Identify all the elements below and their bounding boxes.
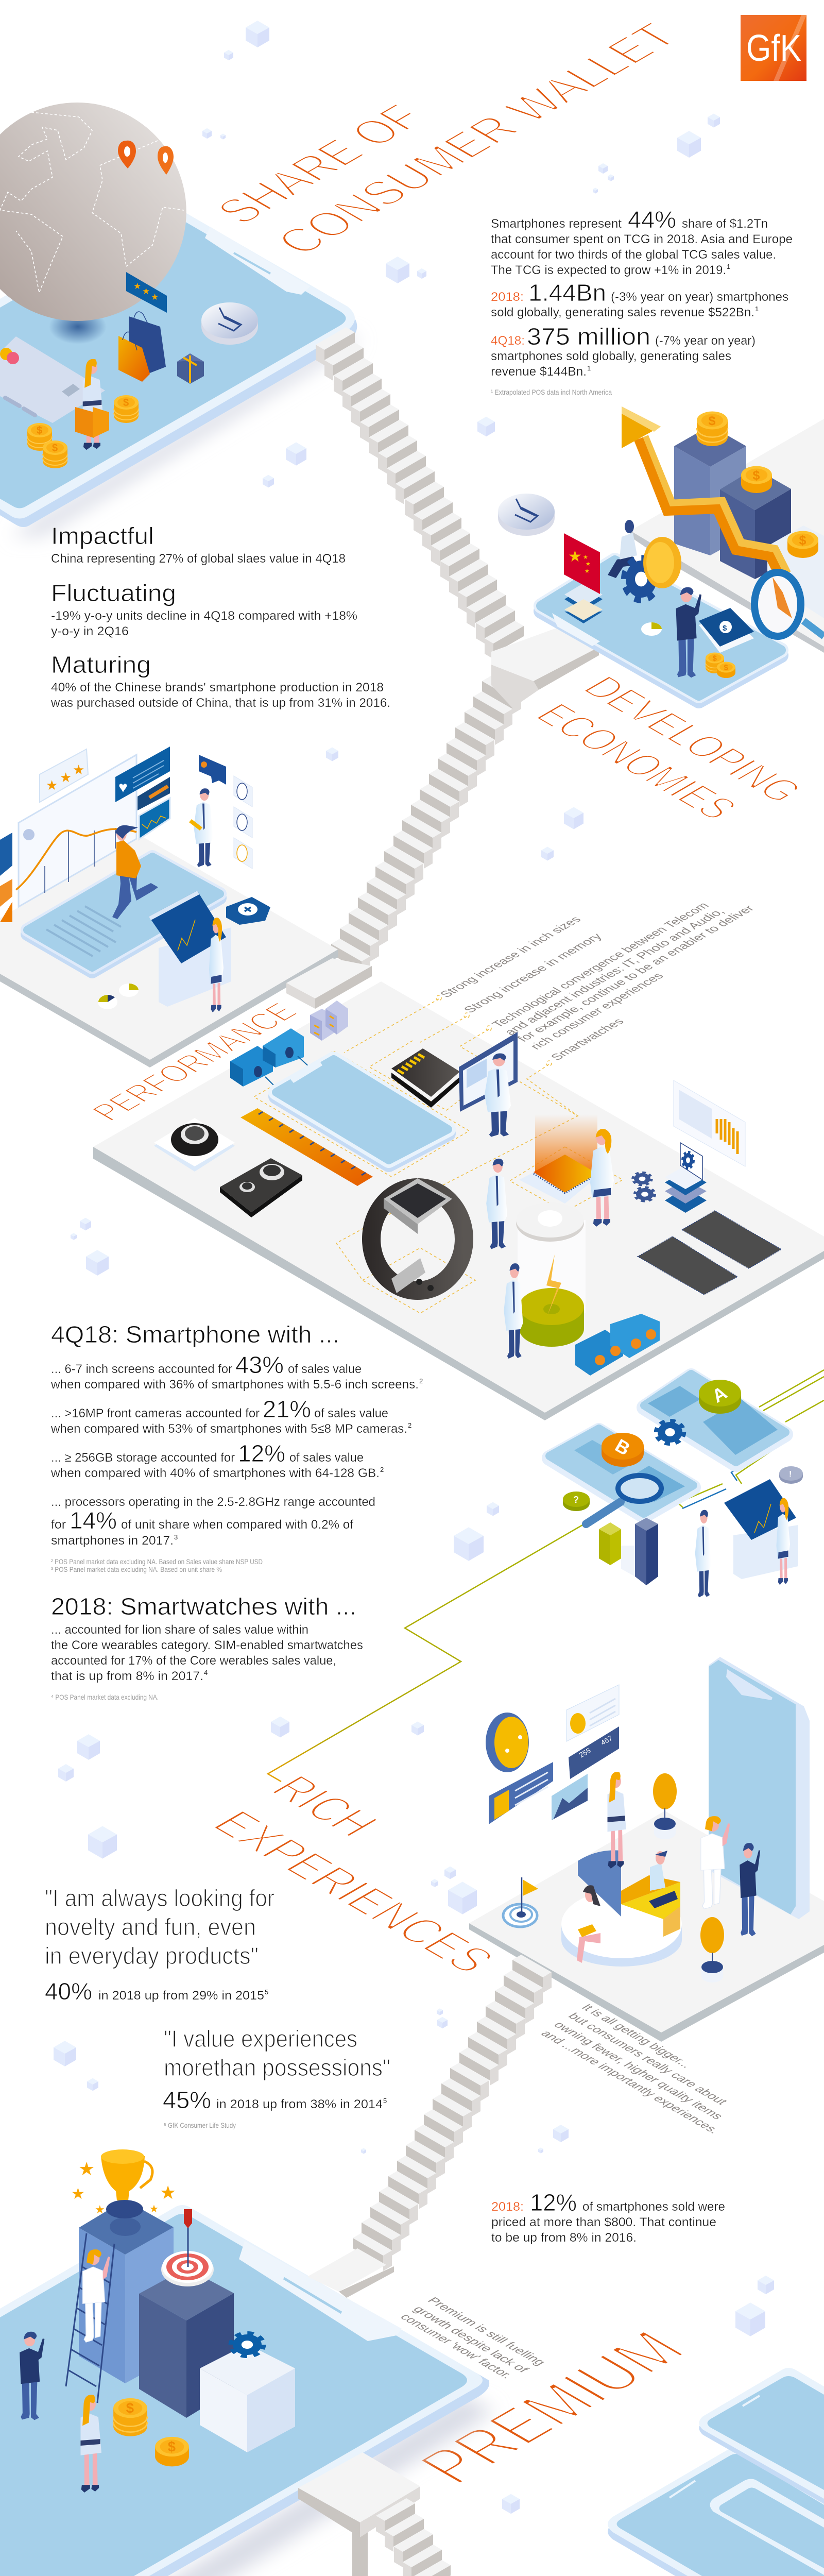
person: woman in navy top bbox=[740, 1843, 760, 1936]
text: smartwatch stats: 4 bbox=[204, 1669, 208, 1676]
title: premium: PREMIUM bbox=[403, 2321, 701, 2494]
card: heart bbox=[115, 747, 170, 802]
badge A bbox=[699, 1380, 741, 1414]
text: wallet stats: 44% bbox=[628, 206, 676, 233]
person: scientist bbox=[695, 1510, 711, 1597]
phone: middle bbox=[710, 2479, 824, 2575]
card: line chart bbox=[139, 798, 170, 839]
card: star rating: ★ bbox=[73, 762, 84, 777]
title: developing economies: ECONOMIES bbox=[525, 697, 748, 826]
person: woman with tablet bbox=[590, 1129, 614, 1227]
icon: trophy with stars: ★ bbox=[95, 2203, 105, 2216]
text: smartphone stats: when compared with 53% of smartphones with 5≤8 MP cameras. bbox=[50, 1422, 407, 1436]
logo: GfK: GfK bbox=[746, 28, 801, 69]
icon: question badge bbox=[563, 1492, 590, 1511]
panel: developing phone bbox=[498, 494, 824, 701]
block: white column right bbox=[767, 526, 824, 618]
icon: coins bbox=[113, 2398, 189, 2466]
gauges bbox=[234, 776, 252, 869]
icon: shopping bags bbox=[118, 312, 166, 382]
icon: ladder bbox=[66, 2233, 114, 2403]
icon: small pie bbox=[641, 622, 662, 636]
phone notch bbox=[205, 227, 310, 295]
text: wallet stats: share of $1.2Tn bbox=[682, 217, 768, 231]
title: performance: PERFORMANCE bbox=[83, 997, 305, 1126]
panel: analytics platform bbox=[0, 747, 338, 1067]
person: climbing woman bbox=[83, 2249, 110, 2342]
panel: rich experiences platform bbox=[469, 1657, 824, 2042]
text: premium stat: 2018: bbox=[491, 2200, 524, 2214]
text: impactful, fluctuating, maturing: Impactful bbox=[51, 522, 154, 549]
text: performance callouts: Technological convergence between Telecom bbox=[489, 901, 712, 1029]
text: performance callouts: for example, continue to be an enabler to deliver bbox=[514, 903, 758, 1044]
icon: magnifier bbox=[586, 1476, 661, 1524]
icon: small pies bbox=[98, 984, 139, 1009]
text: smartphone stats: 21% bbox=[263, 1396, 311, 1422]
text: wallet stats: revenue $144Bn. bbox=[491, 365, 587, 379]
text: experiences quote: 5 bbox=[383, 2097, 387, 2105]
icon: kiosk with chart bbox=[149, 891, 231, 1007]
panel: premium big phone bbox=[0, 2149, 494, 2576]
text: smartwatch stats: the Core wearables category. SIM-enabled smartwatches bbox=[51, 1638, 363, 1652]
text: smartphone stats: 14% bbox=[70, 1507, 117, 1534]
card: star rating bbox=[40, 749, 88, 802]
chart: 3d pie bbox=[561, 1850, 682, 1967]
connector: dashed feature lines bbox=[254, 995, 623, 1313]
text: bigger callout: but consumers really care about bbox=[565, 2011, 730, 2107]
phone: upright display bbox=[709, 1657, 810, 1919]
icon: cooling fans bbox=[575, 1314, 660, 1376]
icon: china flag: ★ bbox=[583, 554, 588, 561]
icon: star rating card: ★ bbox=[151, 292, 159, 302]
stairs: second flight bbox=[331, 676, 521, 977]
landing: below third flight bbox=[307, 2248, 394, 2298]
phone notch bbox=[239, 2241, 402, 2341]
panel: A/B testing cluster bbox=[550, 1374, 803, 1597]
text: novelty quote: in everyday products" bbox=[45, 1942, 259, 1969]
text: bigger callout: It is all getting bigger... bbox=[578, 2002, 695, 2070]
phone A bbox=[644, 1374, 785, 1464]
text: novelty quote bbox=[45, 1885, 274, 2005]
arrow: falling growth arrow bbox=[622, 406, 784, 576]
icon: black memory chips bbox=[638, 1211, 781, 1295]
text: novelty quote: in 2018 up from 29% in 2015 bbox=[98, 1989, 264, 2003]
connector: green line chain bbox=[268, 1370, 824, 1782]
text: smartphone stats: ² POS Panel market data excluding NA. Based on Sales value share NSP USD bbox=[51, 1557, 263, 1566]
text: performance callouts: rich consumer experiences bbox=[527, 971, 667, 1052]
text: smartphone stats: 3 bbox=[174, 1533, 178, 1541]
person: man at tablet bbox=[485, 1053, 511, 1137]
icon: memory card bbox=[391, 1048, 460, 1108]
text: smartphone stats: ... 6-7 inch screens accounted for bbox=[51, 1362, 232, 1376]
icon: credit card bbox=[0, 336, 105, 423]
text: smartphone stats: of sales value bbox=[289, 1451, 364, 1465]
text: experiences quote: morethan possessions" bbox=[164, 2054, 390, 2081]
text: smartwatch stats: 2018: Smartwatches with ... bbox=[51, 1593, 356, 1620]
card: image bbox=[552, 1774, 588, 1820]
icon: location pins bbox=[118, 141, 174, 175]
icon: cart button bbox=[498, 494, 555, 536]
text: premium callout bbox=[397, 2296, 548, 2380]
icon: china flag: ★ bbox=[586, 561, 591, 567]
icon: flag target bbox=[503, 1877, 538, 1927]
text: bigger callout: owning fewer, higher quality items bbox=[551, 2020, 726, 2122]
person: man presenting bbox=[701, 1816, 730, 1909]
icon: target with dart bbox=[161, 2209, 214, 2286]
icon: china flag: ★ bbox=[585, 568, 590, 574]
icon: coins bbox=[706, 652, 735, 678]
person: crouching man bbox=[608, 520, 639, 578]
block: light columns bbox=[674, 426, 746, 555]
chart fragments at left edge bbox=[0, 833, 12, 922]
card: likes counter: 467 bbox=[599, 1734, 614, 1747]
stairs: third flight bbox=[353, 1955, 552, 2271]
text: smartwatch stats: ⁴ POS Panel market data excluding NA. bbox=[51, 1693, 159, 1701]
card: heart: ♥ bbox=[118, 779, 128, 796]
text: novelty quote: "I am always looking for bbox=[45, 1885, 274, 1911]
text: performance callouts bbox=[437, 901, 758, 1062]
stairs: first flight bbox=[316, 327, 524, 659]
card: star rating: ★ bbox=[60, 770, 72, 785]
text: impactful, fluctuating, maturing bbox=[50, 522, 390, 710]
person: man by battery bbox=[504, 1263, 523, 1359]
person: sitting woman bbox=[577, 1885, 600, 1963]
text: wallet stats: 2018: bbox=[491, 290, 524, 304]
person: woman at kiosk bbox=[209, 918, 224, 1012]
text: performance callouts: and adjacent industries: IT, Photo and Audio, bbox=[502, 906, 728, 1037]
text: wallet stats: Smartphones represent bbox=[491, 217, 622, 231]
icon: coins bbox=[27, 395, 139, 468]
block: dark columns bbox=[720, 468, 791, 579]
icon: trophy with stars: ★ bbox=[160, 2182, 176, 2203]
text: wallet stats: sold globally, generating sales revenue $522Bn. bbox=[491, 306, 754, 319]
text: impactful, fluctuating, maturing: 40% of the Chinese brands' smartphone production in 2018 bbox=[51, 681, 384, 694]
chart: iso bars bbox=[599, 1518, 658, 1585]
icon: star rating card bbox=[126, 272, 167, 313]
text: wallet stats: 1 bbox=[727, 263, 730, 270]
phone: front bbox=[699, 2368, 824, 2504]
text: wallet stats: (-3% year on year) smartphones bbox=[611, 290, 788, 304]
icon: camera lens on base bbox=[154, 1118, 235, 1172]
text: experiences quote: ⁵ GfK Consumer Life Study bbox=[164, 2121, 236, 2129]
text: premium stat: to be up from 8% in 2016. bbox=[491, 2231, 637, 2245]
text: smartphone stats: when compared with 40% of smartphones with 64-128 GB. bbox=[50, 1466, 380, 1480]
text: novelty quote: 5 bbox=[265, 1988, 268, 1996]
icon: gears bbox=[633, 1173, 654, 1201]
icon: trophy with stars: ★ bbox=[149, 2204, 159, 2215]
text: smartphone stats: ... ≥ 256GB storage accounted for bbox=[51, 1451, 235, 1465]
text: wallet stats: 4Q18: bbox=[491, 334, 525, 348]
icon: exclamation badge: ! bbox=[789, 1470, 792, 1479]
text: experiences quote bbox=[163, 2025, 390, 2129]
text: smartphone stats: ... >16MP front cameras accounted for bbox=[51, 1406, 260, 1420]
person: man with folder bbox=[486, 1159, 507, 1249]
icon: speech bubble bbox=[199, 755, 226, 785]
text: smartphone stats: 2 bbox=[380, 1466, 384, 1473]
text: experiences quote: "I value experiences bbox=[164, 2025, 357, 2052]
text: premium stat: priced at more than $800. That continue bbox=[491, 2215, 716, 2229]
text: smartwatch stats: accounted for 17% of the Core werables sales value, bbox=[51, 1654, 336, 1668]
text: smartphone stats: 2 bbox=[419, 1377, 423, 1385]
text: smartwatch stats bbox=[51, 1593, 363, 1701]
icon: trophy with stars: ★ bbox=[71, 2185, 85, 2202]
icon: smartwatch bbox=[371, 1178, 464, 1293]
text: premium stat: of smartphones sold were bbox=[582, 2200, 725, 2214]
icon: chat bubble bbox=[486, 1713, 529, 1772]
icon: china flag: ★ bbox=[568, 548, 582, 565]
block: dark column bbox=[139, 2268, 234, 2418]
card: article bbox=[489, 1762, 553, 1824]
icon: star rating card: ★ bbox=[133, 281, 141, 291]
text: performance callouts: Smartwatches bbox=[548, 1016, 627, 1062]
title: rich experiences: EXPERIENCES bbox=[201, 1803, 507, 1980]
text: novelty quote: novelty and fun, even bbox=[45, 1913, 256, 1940]
icon: exclamation badge bbox=[779, 1466, 803, 1484]
phone: performance centre bbox=[276, 1059, 448, 1164]
icon: question badge: ? bbox=[573, 1495, 579, 1505]
icon: gift box bbox=[177, 353, 204, 384]
text: premium stat bbox=[491, 2189, 725, 2245]
title: rich experiences: RICH bbox=[260, 1768, 390, 1844]
phone B bbox=[550, 1429, 693, 1516]
card: emoji review bbox=[566, 1685, 619, 1741]
stairs: fourth flight bbox=[376, 2498, 495, 2576]
person: woman shopper bbox=[75, 359, 109, 450]
text: impactful, fluctuating, maturing: Fluctuating bbox=[51, 580, 176, 606]
text: smartphone stats: 4Q18: Smartphone with ... bbox=[51, 1321, 339, 1348]
chart: orange bars panel bbox=[674, 1080, 745, 1166]
landing: below second flight bbox=[286, 958, 372, 1009]
text: smartphone stats: of sales value bbox=[288, 1362, 362, 1376]
icon: stacked layers bbox=[564, 583, 603, 623]
text: wallet stats: that consumer spent on TCG in 2018. Asia and Europe bbox=[491, 232, 793, 246]
icon: potted plants bbox=[653, 1773, 724, 1982]
icon: ruler bbox=[241, 1108, 373, 1186]
phone notch bbox=[552, 613, 600, 646]
icon: trophy with stars bbox=[71, 2149, 176, 2218]
text: performance callouts: Strong increase in inch sizes bbox=[437, 914, 585, 999]
text: smartphone stats bbox=[50, 1321, 423, 1573]
icon: star rating card: ★ bbox=[142, 286, 150, 296]
card: star rating: ★ bbox=[46, 777, 58, 793]
chart: heart-rate line panel bbox=[16, 755, 136, 907]
text: smartphone stats: for bbox=[51, 1518, 66, 1532]
icon: banknote bbox=[699, 608, 754, 653]
text: bigger callout: and ...more importantly experiences. bbox=[538, 2028, 723, 2136]
text: experiences quote: in 2018 up from 38% in 2014 bbox=[216, 2097, 383, 2111]
icon: globe bbox=[0, 103, 186, 321]
logo: GfK bbox=[741, 15, 806, 81]
text: impactful, fluctuating, maturing: -19% y-o-y units decline in 4Q18 compared with +18% bbox=[51, 609, 357, 623]
text: wallet stats: account for two thirds of the global TCG sales value. bbox=[491, 248, 776, 262]
phone: back bbox=[608, 2447, 824, 2576]
text: smartphone stats: 2 bbox=[408, 1421, 411, 1429]
card: progress bbox=[138, 777, 170, 810]
text: novelty quote: 40% bbox=[45, 1978, 92, 2005]
text: wallet stats bbox=[491, 206, 793, 396]
panel: stacked phones bottom right bbox=[608, 2368, 824, 2576]
landing: between flights bbox=[491, 625, 599, 708]
title: rich experiences bbox=[201, 1768, 507, 1980]
block: tall light column bbox=[79, 2200, 174, 2383]
icon: banknote: $ bbox=[723, 624, 727, 633]
text: premium callout: growth despite lack of bbox=[410, 2304, 532, 2375]
text: impactful, fluctuating, maturing: China representing 27% of global slaes value in 4Q18 bbox=[51, 552, 346, 566]
icon: gear and coin bbox=[625, 537, 681, 599]
panel: developing economies platform bbox=[622, 406, 824, 653]
icon: server stacks bbox=[310, 1001, 348, 1041]
landing with column: premium bbox=[298, 2452, 420, 2576]
text: smartphone stats: 43% bbox=[235, 1351, 284, 1378]
icon: data stack and laptop bbox=[665, 1143, 707, 1213]
person: sitting man bbox=[649, 1851, 678, 1908]
person: pointing man bbox=[20, 2332, 44, 2420]
text: smartwatch stats: that is up from 8% in 2017. bbox=[51, 1669, 203, 1683]
panel: fitness phone bbox=[27, 857, 220, 972]
icon: blue camera modules bbox=[230, 1028, 311, 1090]
icon: cart button bbox=[201, 302, 258, 345]
card: likes counter bbox=[569, 1726, 619, 1779]
badge B: B bbox=[612, 1435, 634, 1460]
icon: battery pedestal bbox=[516, 1202, 586, 1347]
text: wallet stats: ¹ Extrapolated POS data incl North America bbox=[491, 388, 612, 396]
icon: kiosk bbox=[724, 1479, 798, 1579]
icon: gear on block bbox=[232, 2334, 262, 2355]
title: share of consumer wallet: SHARE OF bbox=[204, 97, 436, 231]
icon: gear bbox=[657, 1421, 683, 1443]
text: smartphone stats: 12% bbox=[238, 1440, 285, 1467]
text: smartphone stats: of sales value bbox=[314, 1406, 388, 1420]
text: wallet stats: (-7% year on year) bbox=[655, 334, 756, 348]
icon: tablet bbox=[459, 1032, 518, 1112]
person: runner bbox=[112, 825, 158, 919]
badge A: A bbox=[709, 1382, 731, 1407]
icon: dual camera bbox=[220, 1158, 302, 1217]
card: likes counter: 255 bbox=[578, 1746, 592, 1759]
text: smartphone stats: ... processors operating in the 2.5-2.8GHz range accounted bbox=[51, 1495, 375, 1509]
text: premium callout: Premium is still fuelling bbox=[424, 2295, 548, 2367]
text: performance callouts: Strong increase in memory bbox=[461, 931, 605, 1015]
text: premium stat: 12% bbox=[530, 2189, 577, 2216]
text: wallet stats: The TCG is expected to grow +1% in 2019. bbox=[491, 263, 726, 277]
text: smartphone stats: smartphones in 2017. bbox=[51, 1534, 174, 1548]
icon: magnifier bbox=[754, 572, 824, 636]
text: wallet stats: 375 million bbox=[527, 323, 650, 350]
text: smartphone stats: when compared with 36% of smartphones with 5.5-6 inch screens. bbox=[50, 1378, 419, 1392]
text: wallet stats: 1 bbox=[755, 305, 759, 313]
person: doctor with clipboard bbox=[189, 788, 213, 867]
panel: performance platform bbox=[93, 981, 824, 1420]
icon: shield bbox=[226, 897, 270, 925]
icon: coins on blocks bbox=[697, 411, 818, 558]
block: white column bbox=[200, 2344, 295, 2452]
text: smartwatch stats: ... accounted for lion share of sales value within bbox=[51, 1623, 308, 1637]
icon: china flag bbox=[564, 533, 600, 594]
person: woman with orange hair bbox=[80, 2395, 101, 2493]
text: smartphone stats: ³ POS Panel market data excluding NA. Based on unit share % bbox=[51, 1565, 222, 1573]
person: scientist woman bbox=[776, 1498, 790, 1585]
icon: trophy with stars: ★ bbox=[78, 2158, 95, 2179]
text: wallet stats: smartphones sold globally, generating sales bbox=[491, 349, 731, 363]
text: impactful, fluctuating, maturing: Maturing bbox=[51, 651, 151, 678]
panel: first phone with globe bbox=[0, 103, 360, 536]
badge B bbox=[602, 1433, 644, 1467]
icon: processor chip with glow bbox=[519, 1114, 597, 1204]
text: wallet stats: 1.44Bn bbox=[528, 279, 606, 306]
text: impactful, fluctuating, maturing: was purchased outside of China, that is up from 31% in 2016. bbox=[50, 696, 390, 710]
text: experiences quote: 45% bbox=[163, 2087, 211, 2113]
text: impactful, fluctuating, maturing: y-o-y in 2Q16 bbox=[51, 624, 129, 638]
shadow under globe bbox=[49, 309, 107, 344]
text: wallet stats: 1 bbox=[587, 364, 591, 372]
text: smartphone stats: of unit share when compared with 0.2% of bbox=[121, 1518, 353, 1532]
person: man pointing bbox=[676, 587, 701, 677]
text: premium callout: consumer 'wow' factor. bbox=[397, 2312, 516, 2381]
person: woman with phone on pie bbox=[608, 1772, 626, 1869]
